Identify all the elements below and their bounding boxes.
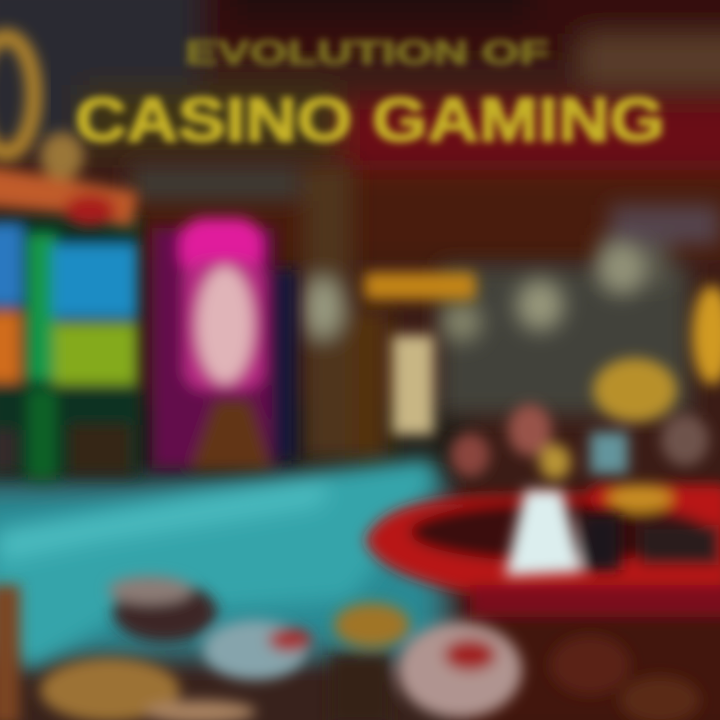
- title: [75, 34, 665, 155]
- grey wall panel: [440, 205, 720, 415]
- slot machine: green: [0, 215, 140, 480]
- slot machine: magenta: [152, 218, 296, 470]
- teal carpet: [0, 458, 440, 670]
- title line 1: EVOLUTION OF: [185, 34, 549, 72]
- slot machine topper: [0, 132, 138, 228]
- gold ring ornament: [0, 37, 34, 153]
- white figure at table: [505, 490, 620, 576]
- lit doorway and amber sign: [364, 272, 476, 435]
- title line 2: CASINO GAMING: [75, 86, 665, 155]
- wooden pillars and centre wall: [130, 165, 646, 460]
- roulette table: [365, 484, 720, 617]
- seated players: [450, 285, 720, 480]
- foreground chips and players: [0, 576, 700, 720]
